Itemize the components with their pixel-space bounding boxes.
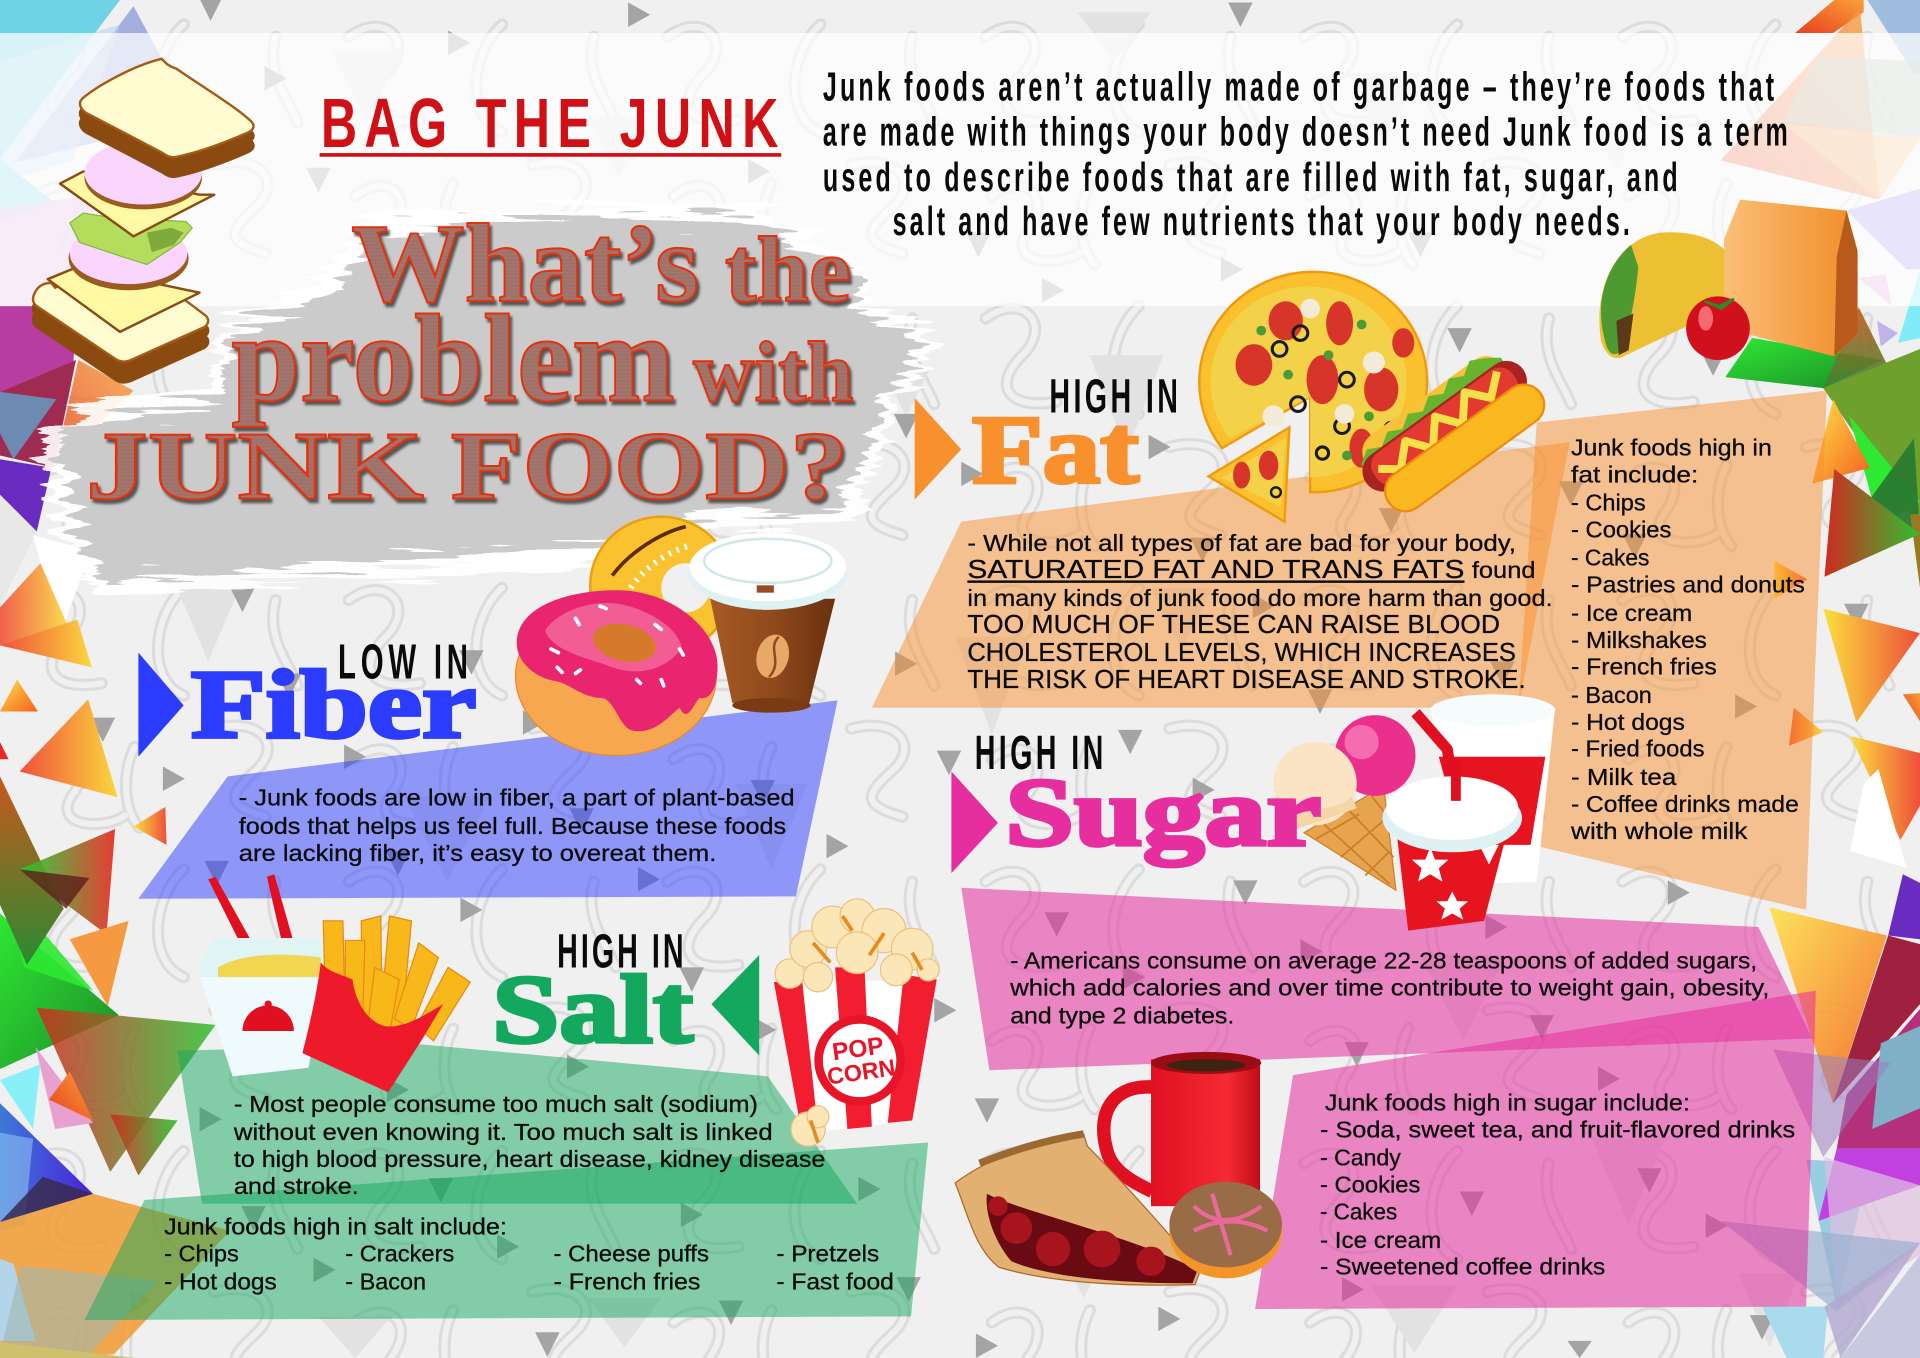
text: salt details: without even knowing it. Too much salt is linked <box>233 1119 773 1145</box>
text: sugar food list: - Candy <box>1320 1145 1401 1171</box>
arrow: fat <box>915 398 961 500</box>
text: sugar food list: - Cakes <box>1320 1199 1397 1225</box>
heading: fiber: Fiber <box>191 651 476 759</box>
text: salt food list <box>164 1213 894 1294</box>
panel: fiber <box>138 700 838 899</box>
decorative triangles: right edge <box>1720 0 1920 1358</box>
icon: ice cream cone <box>1273 715 1416 890</box>
icon: hot dog <box>1344 338 1552 523</box>
arrow: sugar <box>951 771 998 873</box>
icon: popcorn bucket <box>774 899 939 1146</box>
icon: yellow donut <box>590 517 732 654</box>
text: salt food list: - Fast food <box>776 1268 894 1294</box>
text: fat details <box>967 530 1553 694</box>
panel: sugar list <box>1255 991 1816 1309</box>
text: sugar details: which add calories and over time contribute to weight gain, obesity, <box>1009 975 1769 1001</box>
label: high in: HIGH IN <box>557 925 684 978</box>
text: fat food list: - French fries <box>1571 654 1717 680</box>
panel: salt facts <box>178 1045 857 1204</box>
title: bag the junk: BAG THE JUNK <box>321 84 778 162</box>
text: fiber details <box>239 785 795 866</box>
text: fat food list: with whole milk <box>1570 818 1748 844</box>
label: low in: LOW IN <box>338 634 468 689</box>
heading: sugar: Sugar <box>1005 759 1321 867</box>
text: fat food list: - Bacon <box>1571 682 1652 708</box>
top lightening band <box>0 33 1920 306</box>
label: high in: HIGH IN <box>1049 370 1178 424</box>
text block: introduction: Junk foods aren’t actually made of garbage – they’re foods that <box>823 66 1774 110</box>
text: fiber details: foods that helps us feel full. Because these foods <box>239 813 786 839</box>
text: sugar food list: - Cookies <box>1320 1172 1420 1198</box>
icon: red mug <box>1104 1052 1261 1206</box>
main title: the <box>725 219 851 322</box>
heading: salt: Salt <box>492 956 694 1064</box>
icon: chocolate donut <box>1169 1182 1282 1278</box>
icon: noodle box <box>200 874 324 1076</box>
text: fat details: found <box>1472 557 1536 583</box>
text: fiber details: - Junk foods are low in fiber, a part of plant-based <box>239 785 795 811</box>
panel: title brush stroke <box>44 206 931 600</box>
text: fat food list: - Coffee drinks made <box>1571 791 1799 817</box>
text: salt details: and stroke. <box>234 1173 359 1199</box>
text: fat details: CHOLESTEROL LEVELS, WHICH INCREASES <box>967 639 1516 667</box>
icon: sandwich <box>33 59 253 383</box>
text: salt details: - Most people consume too much salt (sodium) <box>234 1091 758 1117</box>
text block: introduction: used to describe foods that are filled with fat, sugar, and <box>823 156 1678 201</box>
text: fat food list: fat include: <box>1571 461 1698 487</box>
text: salt food list: - Chips <box>164 1240 239 1266</box>
text: fiber details: are lacking fiber, it’s easy to overeat them. <box>239 840 716 866</box>
text: fat details: in many kinds of junk food do more harm than good. <box>967 585 1553 611</box>
main title: What’s <box>351 202 699 326</box>
text: fat food list: - Ice cream <box>1571 600 1692 626</box>
label: high in: HIGH IN <box>975 727 1103 780</box>
text: fat food list: - Milk tea <box>1571 764 1676 790</box>
main title: FOOD? <box>451 412 849 520</box>
text: salt food list: - Bacon <box>345 1268 426 1294</box>
arrow: fiber <box>138 653 184 757</box>
text: fat food list: - Pastries and donuts <box>1571 572 1805 598</box>
panel: fat list <box>1518 391 1827 910</box>
text: sugar details: - Americans consume on average 22-28 teaspoons of added sugars, <box>1010 948 1757 974</box>
text: salt details: to high blood pressure, heart disease, kidney disease <box>234 1146 825 1172</box>
section: high in sugar <box>951 694 1816 1309</box>
text: sugar food list: - Sweetened coffee drinks <box>1320 1254 1605 1280</box>
decorative triangles: left edge <box>0 0 230 1358</box>
text: salt food list: - Crackers <box>345 1240 454 1266</box>
icon: cherry pie <box>955 1134 1200 1285</box>
icon: pizza <box>1199 272 1427 522</box>
icon: taco and paper bag <box>1599 200 1858 360</box>
text: salt food list: - Pretzels <box>776 1240 879 1266</box>
section: low in fiber <box>138 517 847 899</box>
panel: sugar facts <box>961 888 1812 1070</box>
icon: coffee cup <box>688 533 847 713</box>
text: fat food list <box>1570 435 1805 844</box>
text: fat details: THE RISK OF HEART DISEASE AND STROKE. <box>967 666 1526 694</box>
icon: soda glass <box>1430 694 1555 884</box>
text: salt food list: - Cheese puffs <box>553 1240 709 1266</box>
arrow: salt <box>711 955 759 1056</box>
text: salt food list: - French fries <box>553 1268 700 1294</box>
text block: introduction: are made with things your body doesn’t need Junk food is a term <box>823 111 1788 155</box>
main title: JUNK <box>86 412 424 520</box>
text: salt food list: Junk foods high in salt include: <box>164 1213 507 1239</box>
text: fat food list: - Cookies <box>1571 517 1671 543</box>
text block: introduction <box>823 66 1788 245</box>
text: sugar details <box>1009 948 1769 1029</box>
text: fat food list: - Chips <box>1571 490 1646 516</box>
icon: red soda cup <box>1382 713 1522 931</box>
text: sugar food list: Junk foods high in sugar include: <box>1325 1090 1690 1116</box>
text block: introduction: salt and have few nutrients that your body needs. <box>893 200 1630 245</box>
text: fat food list: - Fried foods <box>1571 736 1704 762</box>
text: fat details: - While not all types of fat are bad for your body, <box>967 530 1516 556</box>
icon: fries <box>302 916 470 1092</box>
text: sugar food list <box>1320 1090 1795 1280</box>
text: sugar food list: - Ice cream <box>1320 1227 1441 1253</box>
icon: popcorn bucket: POP <box>831 1032 886 1066</box>
text: fat food list: Junk foods high in <box>1571 435 1772 461</box>
text: fat food list: - Cakes <box>1571 545 1649 571</box>
section: high in fat <box>872 200 1858 910</box>
section: high in salt <box>84 874 939 1320</box>
text: fat details: SATURATED FAT AND TRANS FATS <box>967 556 1464 584</box>
main title: problem <box>231 290 675 428</box>
text: salt details <box>233 1091 825 1199</box>
panel: fat facts <box>872 442 1570 708</box>
text: fat details: TOO MUCH OF THESE CAN RAISE BLOOD <box>967 611 1500 639</box>
heading: fat: Fat <box>972 396 1139 504</box>
panel: salt list <box>84 1142 928 1320</box>
text: fat food list: - Hot dogs <box>1571 709 1685 735</box>
main title <box>86 202 853 520</box>
text: sugar details: and type 2 diabetes. <box>1010 1003 1234 1029</box>
text: fat food list: - Milkshakes <box>1571 627 1707 653</box>
text: salt food list: - Hot dogs <box>164 1268 277 1294</box>
icon: pink donut <box>516 590 718 756</box>
main title: with <box>693 324 853 419</box>
text: sugar food list: - Soda, sweet tea, and fruit-flavored drinks <box>1320 1117 1795 1143</box>
icon: popcorn bucket: CORN <box>825 1054 897 1090</box>
